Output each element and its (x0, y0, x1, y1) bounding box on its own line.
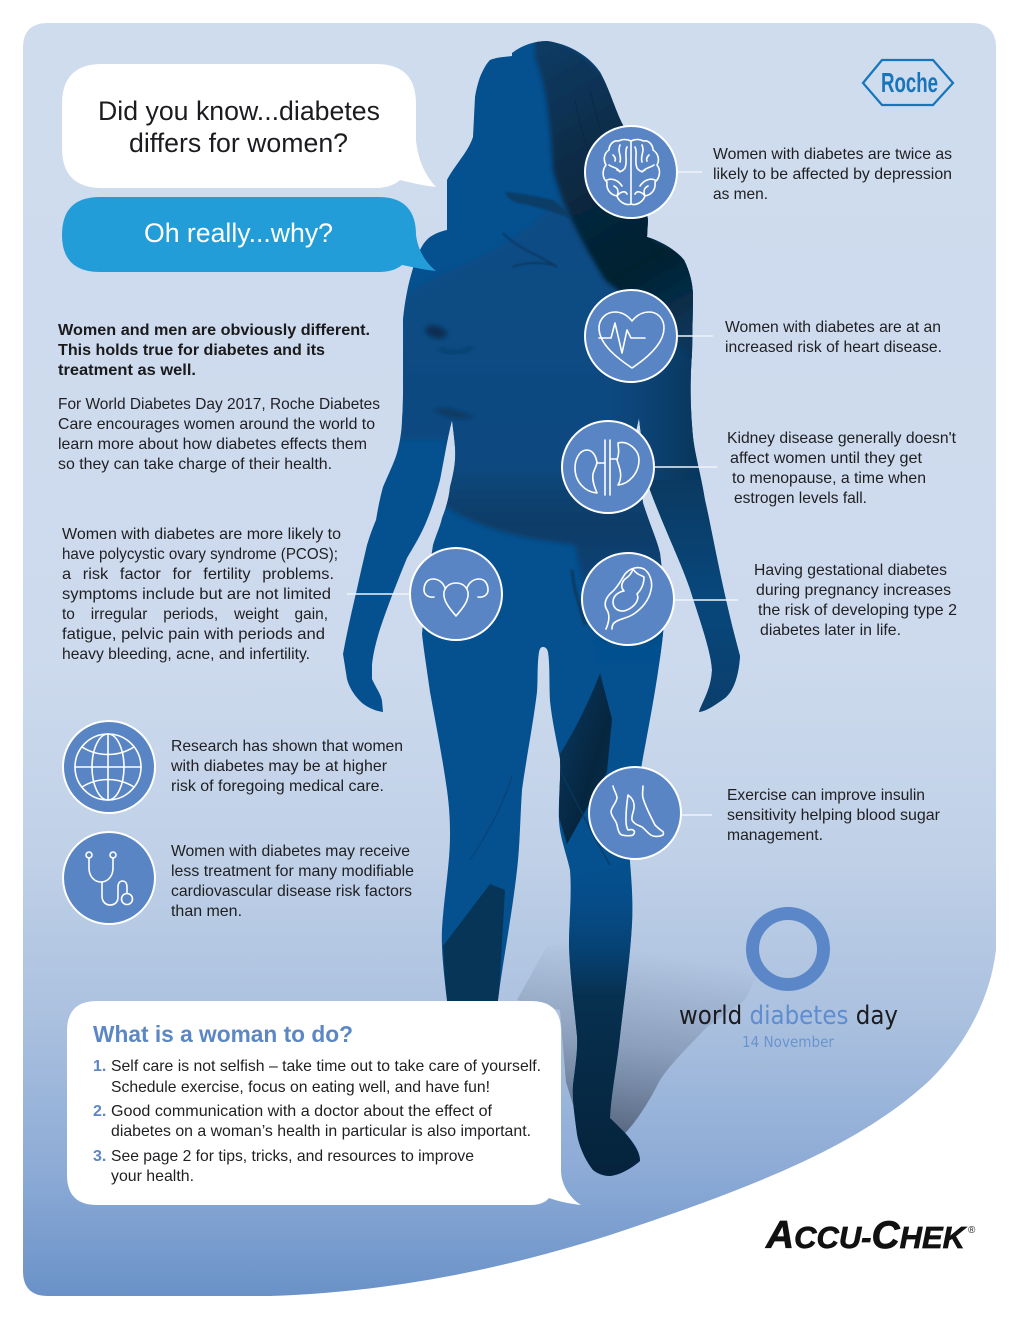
list item 1: Self care is not selfish – take time out to take care of yourself. (111, 1058, 541, 1075)
list item 1: 1. (93, 1058, 106, 1075)
intro text: For World Diabetes Day 2017, Roche Diabetes (58, 396, 380, 413)
list item 2: 2. (93, 1103, 106, 1120)
logo: Roche: Roche (881, 67, 938, 98)
text: heart disease: increased risk of heart disease. (725, 339, 942, 356)
text: kidney disease (727, 430, 957, 507)
speech bubble: question (62, 64, 436, 188)
text: PCOS: heavy bleeding, acne, and infertility. (62, 646, 310, 663)
logo: world diabetes day (679, 914, 898, 1051)
speech bubble: answer (62, 197, 436, 272)
list item 2: Good communication with a doctor about the effect of (111, 1103, 493, 1120)
text: kidney disease: estrogen levels fall. (734, 490, 867, 507)
icon: brain (585, 126, 677, 218)
intro text: so they can take charge of their health. (58, 456, 332, 473)
text: gestational diabetes: during pregnancy increases (756, 582, 951, 599)
list item 2 (93, 1103, 531, 1140)
intro heading: treatment as well. (58, 362, 196, 379)
text: cardiovascular treatment: Women with diabetes may receive (171, 843, 410, 860)
icon: heart (585, 290, 677, 382)
text: heart disease (725, 319, 942, 356)
icon: feet (589, 767, 681, 859)
logo: world diabetes day: world diabetes day (679, 1001, 898, 1031)
text: exercise: Exercise can improve insulin (727, 787, 925, 804)
speech bubble: answer: Oh really...why? (144, 218, 333, 248)
text: gestational diabetes (754, 562, 957, 639)
text: medical care: with diabetes may be at higher (170, 758, 388, 775)
text: PCOS: a risk factor for fertility problems. (62, 566, 334, 583)
text: depression: as men. (713, 186, 768, 203)
text: gestational diabetes: the risk of developing type 2 (758, 602, 957, 619)
text: PCOS: have polycystic ovary syndrome (PCOS); (62, 546, 338, 563)
icon: fetus (582, 553, 674, 645)
woman silhouette (330, 30, 750, 1190)
list item 2: diabetes on a woman’s health in particular is also important. (111, 1123, 531, 1140)
speech bubble: question: differs for women? (129, 128, 348, 158)
list item 3: 3. (93, 1148, 106, 1165)
intro text: Care encourages women around the world to (58, 416, 375, 433)
list item 3: See page 2 for tips, tricks, and resources to improve (111, 1148, 474, 1165)
list item 3: your health. (111, 1168, 194, 1185)
panel: what is a woman to do (67, 1001, 581, 1205)
logo: Accu-Chek: ACCU-CHEK (765, 1214, 968, 1257)
text: cardiovascular treatment: cardiovascular disease risk factors (171, 883, 412, 900)
text: PCOS: symptoms include but are not limited (62, 586, 331, 603)
logo: Accu-Chek: ® (968, 1225, 976, 1236)
icon: globe (63, 721, 155, 813)
intro text (58, 396, 380, 473)
text: cardiovascular treatment: less treatment for many modifiable (171, 863, 414, 880)
text: medical care (170, 738, 403, 795)
icon: stethoscope (63, 832, 155, 924)
list item 1 (93, 1058, 541, 1096)
text: depression: Women with diabetes are twice as (713, 146, 952, 163)
connector lines (347, 172, 738, 815)
logo: world diabetes day: 14 November (742, 1033, 835, 1051)
speech bubble: question: Did you know...diabetes (98, 96, 380, 126)
text: depression: likely to be affected by depression (713, 166, 952, 183)
list item 1: Schedule exercise, focus on eating well, and have fun! (111, 1079, 490, 1096)
icon: uterus (410, 548, 502, 640)
intro heading: This holds true for diabetes and its (58, 342, 325, 359)
text: depression (713, 146, 952, 203)
text: gestational diabetes: diabetes later in life. (760, 622, 901, 639)
icon: kidneys (562, 421, 654, 513)
text: kidney disease: to menopause, a time when (732, 470, 926, 487)
text: kidney disease: Kidney disease generally doesn't (727, 430, 957, 447)
body cast shadow (517, 958, 749, 1133)
text: cardiovascular treatment: than men. (171, 903, 242, 920)
text: PCOS: Women with diabetes are more likely to (62, 526, 341, 543)
panel heading: What is a woman to do? (93, 1021, 353, 1047)
text: exercise (727, 787, 941, 844)
text: cardiovascular treatment (171, 843, 414, 920)
text: exercise: sensitivity helping blood sugar (727, 807, 941, 824)
text: gestational diabetes: Having gestational diabetes (754, 562, 947, 579)
text: medical care: Research has shown that women (171, 738, 403, 755)
intro text: learn more about how diabetes effects them (58, 436, 367, 453)
text: PCOS (62, 526, 341, 663)
text: heart disease: Women with diabetes are at an (725, 319, 941, 336)
text: PCOS: to irregular periods, weight gain, (62, 606, 328, 623)
list item 3 (93, 1148, 474, 1185)
text: exercise: management. (727, 827, 823, 844)
text: kidney disease: affect women until they get (730, 450, 923, 467)
logo: Roche (863, 60, 953, 105)
intro heading (58, 322, 370, 379)
text: medical care: risk of foregoing medical care. (171, 778, 384, 795)
text: PCOS: fatigue, pelvic pain with periods and (62, 626, 325, 643)
intro heading: Women and men are obviously different. (58, 322, 370, 339)
